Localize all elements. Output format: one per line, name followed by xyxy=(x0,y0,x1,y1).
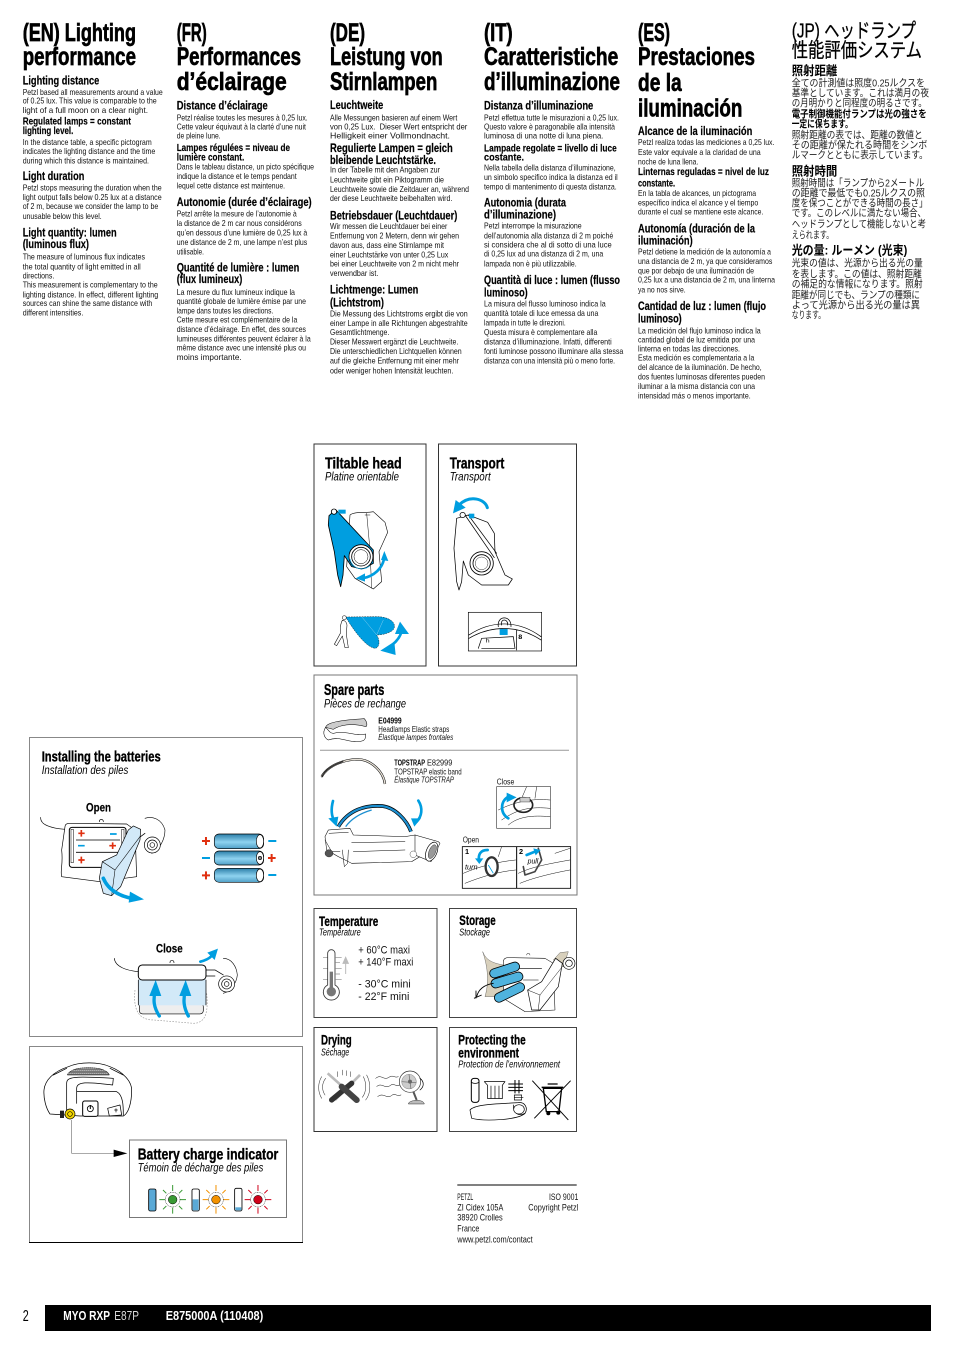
text block: ES alcance: Este valor equivale a la claridad de una xyxy=(638,147,761,157)
text block: DE Leuchtweite: Leuchtweite sowie die Zeitdauer an, während xyxy=(330,184,469,194)
heading: FR: d’éclairage xyxy=(177,68,287,96)
text block: IT lumen: La misura del flusso luminoso indica la xyxy=(484,299,606,309)
text block: DE Lichtmenge: Lichtmenge: Lumen xyxy=(330,283,418,296)
text block: IT distanza: costante. xyxy=(484,153,524,164)
text block: ES cantidad: dos fuentes luminosas diferentes pueden xyxy=(638,371,765,381)
text block: E04999 elastic straps xyxy=(378,716,454,742)
text block: ES cantidad: linterna en todas las direcciones. xyxy=(638,344,740,354)
heading: ES xyxy=(638,19,755,123)
text block: ES alcance: constante. xyxy=(638,179,675,190)
heading: ES: Prestaciones xyxy=(638,43,755,71)
text block: JP lighting distance: 照射距離 xyxy=(792,63,838,78)
panel: installing the batteries: Close xyxy=(156,942,183,955)
text block: JP light quantity: 光の量: ルーメン (光束) xyxy=(792,242,907,257)
text block: JP light quantity: を表します。この値は、照射距離 xyxy=(792,267,922,280)
panel: transport: Transport xyxy=(450,470,491,484)
heading: JP xyxy=(792,20,922,62)
panel: temperature xyxy=(314,908,437,1018)
heading: FR xyxy=(177,19,301,96)
heading: IT: (IT) xyxy=(484,19,513,47)
heading: IT xyxy=(484,19,620,96)
text block: FR lumen: lumineuses différentes peuvent éclairer à la xyxy=(177,333,311,343)
text block: IT distanza: tempo di mantenimento di questa distanza. xyxy=(484,181,617,191)
heading: DE: (DE) xyxy=(330,19,365,47)
text block: IT autonomia xyxy=(484,197,614,269)
icon: three batteries polarity xyxy=(202,834,276,882)
panel: installing the batteries: Installing the batteries xyxy=(42,749,161,766)
panel: tiltable head: Tiltable head xyxy=(325,455,402,472)
text block: ES cantidad: Esta medición es complementaria a la xyxy=(638,353,755,363)
footer: Petzl address: France xyxy=(457,1224,479,1234)
column: FR performances d'eclairage xyxy=(177,19,314,362)
text block: JP lighting distance: 基準としています。これは満月の夜 xyxy=(792,87,929,100)
text block: FR distance: lumière constant. xyxy=(177,153,244,164)
icon: elastic strap xyxy=(324,719,367,742)
icon: headlamp with topstrap xyxy=(325,801,440,867)
page number: 2 xyxy=(23,1308,29,1325)
text block: EN lighting distance: Regulated lamps = constant xyxy=(23,116,131,127)
text block: IT distanza: luminosa di una notte di luna piena. xyxy=(484,131,603,141)
panel: spare parts: Pièces de rechange xyxy=(324,696,406,710)
text block: topstrap: TOPSTRAP xyxy=(394,759,425,768)
text block: EN lighting distance: lighting level. xyxy=(23,126,73,137)
icon: thermometer xyxy=(323,950,348,1000)
text block: DE Leuchtweite xyxy=(330,99,469,203)
icon: transport locked detail inset: h xyxy=(486,638,490,644)
text block: IT autonomia: d’illuminazione) xyxy=(484,208,556,221)
text block: topstrap: TOPSTRAP elastic band xyxy=(394,766,462,776)
text block: FR autonomie: Petzl arrête la mesure de l’autonomie à xyxy=(177,209,297,219)
icon: open topstrap detail: 2 xyxy=(519,847,523,856)
text block: EN lighting distance: Petzl based all measurements around a value xyxy=(23,87,163,97)
footer: Petzl address: ZI Cidex 105A xyxy=(457,1203,503,1213)
icon: tilted headlamp side view xyxy=(328,509,388,589)
text block: ES alcance xyxy=(638,125,774,217)
heading: DE: Stirnlampen xyxy=(330,68,437,96)
text block: temperature range: + 140°F maxi xyxy=(358,957,413,969)
text block: ES autonomia: iluminación) xyxy=(638,234,693,247)
text block: DE Leuchtweite: Leuchtweite gibt ein Piktogramm die xyxy=(330,175,444,185)
panel: tiltable head xyxy=(314,444,426,666)
panel: protecting the environment xyxy=(450,1028,576,1132)
text block: FR lumen xyxy=(177,262,311,362)
heading: IT: d’illuminazione xyxy=(484,68,620,96)
heading: EN xyxy=(23,19,136,71)
text block: DE Betriebsdauer: davon aus, dass eine Stirnlampe mit xyxy=(330,240,445,250)
text block: EN light duration: light output falls below 0.25 lux at a distance xyxy=(23,192,162,202)
text block: EN light quantity: directions. xyxy=(23,271,54,281)
footer bar: product reference: E875000A (110408) xyxy=(166,1308,263,1323)
icon: close battery compartment xyxy=(114,949,237,1023)
text block: JP light duration: の距離で最低でも0.25ルクスの照 xyxy=(792,187,925,200)
text block: ES autonomia: Petzl detiene la medición de la autonomía a xyxy=(638,246,771,256)
icon: close topstrap detail: Close xyxy=(497,776,515,786)
heading: EN: (EN) Lighting xyxy=(23,19,136,47)
text block: IT lumen: fonti luminose possono illuminare alla stessa xyxy=(484,346,624,356)
text block: topstrap: Élastique TOPSTRAP xyxy=(394,775,454,785)
text block: ES autonomia: ya no nos sirve. xyxy=(638,284,686,294)
text block: ES cantidad: luminoso) xyxy=(638,312,682,325)
footer: Petzl address xyxy=(456,1185,578,1244)
panel: tiltable head: Platine orientable xyxy=(325,470,399,484)
text block: JP lighting distance: 一定に保ちます。 xyxy=(792,117,853,130)
text block: IT lumen: lampada in tutte le direzioni. xyxy=(484,318,566,328)
text block: JP lighting distance: その距離が保たれる時間をシンボ xyxy=(792,138,927,151)
text block: JP light duration: です。このレベルに満たない場合、 xyxy=(792,207,926,220)
heading: ES: iluminación xyxy=(638,95,742,123)
text block: DE Betriebsdauer: Betriebsdauer (Leuchtdauer) xyxy=(330,209,457,222)
arrow: indicator pointer xyxy=(72,1120,127,1157)
text block: IT distanza: Lampade regolate = livello di luce xyxy=(484,143,617,154)
text block: FR lumen: (flux lumineux) xyxy=(177,273,242,286)
text block: JP light quantity: よって光源から出る光の量は異 xyxy=(792,298,920,311)
text block: JP lighting distance: の月明かりと同程度の明るさです。 xyxy=(792,97,927,110)
text block: JP light duration: 度を保つことができる時間の長さ」 xyxy=(792,197,928,210)
footer: Petzl address: ISO 9001 xyxy=(549,1192,578,1202)
text block: ES alcance: Linternas reguladas = nivel de luz xyxy=(638,167,769,178)
text block: JP light duration: 照射時間 xyxy=(792,164,837,179)
text block: ES autonomia: que por debajo de una iluminación de xyxy=(638,265,754,275)
text block: DE Lichtmenge: Gesamtlichtmenge. xyxy=(330,327,389,337)
text block: EN lighting distance: Lighting distance xyxy=(23,75,100,88)
text block: JP light duration: えられます。 xyxy=(792,229,833,241)
panel: installing the batteries: Installation des piles xyxy=(42,763,128,777)
text block: temperature range: + 60°C maxi xyxy=(358,944,410,956)
text block: EN light quantity: sources can shine the same distance with xyxy=(23,298,153,308)
text block: JP light duration: ヘッドランプとして機能しないと考 xyxy=(792,217,926,230)
text block: EN lighting distance: during which this distance is maintained. xyxy=(23,155,149,165)
text block: JP lighting distance xyxy=(792,63,929,161)
text block: ES autonomia xyxy=(638,223,775,294)
footer: Petzl address: Copyright Petzl xyxy=(528,1203,578,1213)
footer bar: product reference: E87P xyxy=(114,1308,139,1323)
text block: topstrap: E82999 xyxy=(427,758,453,768)
text block: ES cantidad: cantidad global de luz emitida por una xyxy=(638,335,755,345)
text block: JP light quantity xyxy=(792,242,923,321)
panel: temperature: Temperature xyxy=(319,913,378,929)
text block: FR distance: indique la distance et le temps pendant xyxy=(177,171,297,181)
text block: EN light duration: of 2 m, because we consider the lamp to be xyxy=(23,201,159,211)
icon: recyclable parts xyxy=(470,1078,526,1120)
text block: E04999 elastic straps: Élastique lampes frontales xyxy=(378,732,454,742)
text block: JP light duration xyxy=(792,164,928,241)
text block: EN lighting distance: In the distance table, a specific pictogram xyxy=(23,137,152,147)
heading: JP: 性能評価システム xyxy=(792,39,922,62)
text block: DE Leuchtweite: Leuchtweite xyxy=(330,99,384,112)
icon: headlamp folded side view xyxy=(454,512,512,590)
callout: battery charge indicator: Témoin de décharge des piles xyxy=(138,1161,263,1175)
text block: EN light quantity: (luminous flux) xyxy=(23,238,89,251)
text block: EN light quantity: the total quantity of light emitted in all xyxy=(23,261,141,271)
text block: DE Lichtmenge: Die Messung des Lichtstroms ergibt die von xyxy=(330,309,468,319)
icon: open topstrap detail xyxy=(462,835,571,888)
icon: transport arrow xyxy=(453,499,487,513)
text block: ES alcance: En la tabla de alcances, un pictograma xyxy=(638,188,756,198)
icon: light beam tilt pictogram xyxy=(334,616,409,655)
column: JP headlamp performance xyxy=(792,20,929,321)
heading: DE xyxy=(330,19,443,96)
text block: EN light quantity: lighting distance. In effect, different lighting xyxy=(23,289,159,299)
text block: E04999 elastic straps: Headlamps Elastic straps xyxy=(378,724,449,734)
text block: ES alcance: Alcance de la iluminación xyxy=(638,125,752,138)
text block: FR distance: de pleine lune. xyxy=(177,131,221,141)
icon: open topstrap detail: 1 xyxy=(465,847,469,856)
text block: JP light quantity: 距離が同じでも、ランプの種類に xyxy=(792,288,920,301)
callout: battery charge indicator: Battery charge indicator xyxy=(138,1146,278,1163)
panel: battery charge indicator location xyxy=(29,1046,303,1242)
text block: FR lumen: La mesure du flux lumineux indique la xyxy=(177,287,295,297)
column: ES Prestaciones de la iluminacion xyxy=(638,19,775,400)
text block: IT distanza: Nella tabella della distanza d’illuminazione, xyxy=(484,163,616,173)
heading: IT: Caratteristiche xyxy=(484,43,618,71)
text block: FR distance: Distance d’éclairage xyxy=(177,99,268,112)
text block: ES autonomia: una distancia de 2 m, ya que consideramos xyxy=(638,256,772,266)
heading: JP: (JP) ヘッドランプ xyxy=(792,20,916,42)
text block: DE Leuchtweite: In der Tabelle mit den Angaben zur xyxy=(330,165,440,175)
text block: DE Betriebsdauer: verwendbar ist. xyxy=(330,268,378,278)
text block: IT autonomia: Petzl interrompe la misurazione xyxy=(484,220,582,230)
text block: FR autonomie xyxy=(177,196,312,256)
text block: FR lumen: même distance avec une intensité plus ou xyxy=(177,343,306,353)
text block: IT distanza: Questo valore è paragonabile alla intensità xyxy=(484,121,615,131)
text block: FR autonomie: la distance de 2 m car nous considérons xyxy=(177,218,302,228)
text block: IT distanza xyxy=(484,99,619,191)
text block: FR lumen: moins importante. xyxy=(177,352,242,362)
text block: JP light quantity: なります。 xyxy=(792,309,825,321)
icon: open topstrap detail: Open xyxy=(463,835,479,845)
text block: FR distance: Dans le tableau distance, un picto spécifique xyxy=(177,161,314,171)
text block: DE Betriebsdauer: Entfernung von 2 Metern, denn wir gehen xyxy=(330,230,459,240)
text block: EN lighting distance: light of a full moon on a clear night. xyxy=(23,105,148,115)
text block: IT autonomia: lampada non è più utilizzabile. xyxy=(484,259,577,269)
heading: ES: (ES) xyxy=(638,19,670,47)
text block: FR distance: Petzl réalise toutes les mesures à 0,25 lux. xyxy=(177,113,308,123)
icon: transport locked detail inset: 8 xyxy=(518,635,523,641)
text block: IT distanza: un simbolo specifico indica la distanza ed il xyxy=(484,172,618,182)
heading: FR: (FR) xyxy=(177,19,207,47)
text block: JP lighting distance: 照射距離の表では、距離の数値と xyxy=(792,128,923,141)
panel: spare parts xyxy=(314,675,577,895)
footer bar: product reference: MYO RXP xyxy=(63,1308,110,1323)
text block: DE Leuchtweite: von 0,25 Lux. Dieser Wert entspricht der xyxy=(330,121,467,131)
panel: spare parts: Spare parts xyxy=(324,682,384,699)
text block: JP lighting distance: 電子制御機能付ランプは光の強さを xyxy=(792,107,927,120)
text block: FR lumen: distance d’éclairage. En effet, des sources xyxy=(177,324,306,334)
text block: ES cantidad: del alcance de la iluminación. De hecho, xyxy=(638,362,762,372)
footer: Petzl address: 38920 Crolles xyxy=(457,1213,503,1223)
icon: crossed-out waste bin xyxy=(532,1081,571,1120)
icon: transport locked detail inset xyxy=(468,612,542,651)
icon: open topstrap detail: turn xyxy=(465,862,478,871)
icon: stored batteries removed from lamp xyxy=(474,952,575,1012)
icon: do not shake and use fan xyxy=(319,1070,424,1104)
heading: EN: performance xyxy=(23,43,136,71)
text block: DE Lichtmenge: Dieser Messwert ergänzt die Leuchtweite. xyxy=(330,336,458,346)
text block: EN lighting distance: indicates the lighting distance and the time xyxy=(23,146,156,156)
text block: IT lumen: luminoso) xyxy=(484,287,528,300)
panel: protecting the environment: environment xyxy=(458,1044,519,1060)
text block: DE Lichtmenge: Die unterschiedlichen Lichtquellen können xyxy=(330,346,462,356)
text block: EN light duration xyxy=(23,170,162,221)
panel: storage xyxy=(450,908,576,1018)
text block: DE Leuchtweite: Alle Messungen basieren auf einem Wert xyxy=(330,113,458,123)
text block: JP lighting distance: 全ての計測値は照度0.25ルクスを xyxy=(792,77,925,90)
panel: drying: Drying xyxy=(321,1032,352,1048)
footer bar: product reference xyxy=(45,1305,931,1331)
text block: IT lumen: distanza con una intensità più o meno forte. xyxy=(484,355,615,365)
panel: protecting the environment: Protecting the xyxy=(458,1032,526,1048)
column: EN lighting performance xyxy=(23,19,163,318)
heading: DE: Leistung von xyxy=(330,43,443,71)
text block: DE Leuchtweite: der diese Leuchtweite beibehalten wird. xyxy=(330,193,452,203)
text block: IT autonomia: si considera che al di sotto di una luce xyxy=(484,239,612,249)
panel: temperature: Température xyxy=(319,928,361,939)
panel: drying xyxy=(314,1028,437,1132)
text block: DE Leuchtweite: Helligkeit einer Vollmondnacht. xyxy=(330,131,450,141)
text block: ES alcance: noche de luna llena. xyxy=(638,156,698,166)
footer: Petzl address: PETZL xyxy=(457,1192,473,1202)
text block: ES autonomia: 0,25 lux a una distancia de 2 m, una linterna xyxy=(638,275,775,285)
text block: ES alcance: durante el cual se mantiene este alcance. xyxy=(638,207,763,217)
text block: ES cantidad: La medición del flujo luminoso indica la xyxy=(638,325,761,335)
icon: headlamp front view xyxy=(44,1063,132,1119)
text block: EN light quantity: This measurement is complementary to the xyxy=(23,279,158,289)
text block: JP lighting distance: ルマークとともに表示しています。 xyxy=(792,149,928,161)
text block: IT lumen xyxy=(484,274,624,365)
text block: DE Lichtmenge: oder weniger hohen Intensität leuchten. xyxy=(330,365,453,375)
icon: open battery compartment xyxy=(41,817,165,903)
text block: FR distance: Lampes régulées = niveau de xyxy=(177,143,290,154)
text block: DE Betriebsdauer: Wir messen die Leuchtdauer bei einer xyxy=(330,221,447,231)
panel: installing the batteries: Open xyxy=(86,802,111,815)
text block: EN light quantity: different intensities. xyxy=(23,308,83,318)
text block: IT lumen: Quantità di luce : lumen (flusso xyxy=(484,274,620,287)
text block: DE Lichtmenge: auf die gleiche Entfernung mit einer mehr xyxy=(330,355,459,365)
text block: IT lumen: quantità totale di luce emessa da una xyxy=(484,308,599,318)
text block: ES cantidad: intensidad más o menos importante. xyxy=(638,390,751,400)
panel: installing the batteries xyxy=(30,738,302,1036)
text block: EN light quantity: The measure of luminous flux indicates xyxy=(23,251,145,261)
heading: ES: de la xyxy=(638,69,683,97)
panel: transport: Transport xyxy=(450,455,505,472)
text block: FR autonomie: qu’en dessous d’une lumière de 0,25 lux à xyxy=(177,227,308,237)
text block: ES cantidad: iluminar a la misma distancia con una xyxy=(638,381,755,391)
text block: temperature range: - 22°F mini xyxy=(358,991,409,1003)
text block: FR lumen: Quantité de lumière : lumen xyxy=(177,262,299,275)
text block: FR distance xyxy=(177,99,314,191)
text block: IT lumen: distanza d’illuminazione. Infatti, differenti xyxy=(484,336,612,346)
text block: temperature range xyxy=(358,944,413,1003)
panel: protecting the environment: Protection de l’environnement xyxy=(458,1060,561,1071)
text block: FR autonomie: une distance de 2 m, une lampe n’est plus xyxy=(177,237,307,247)
text block: EN light quantity: Light quantity: lumen xyxy=(23,227,117,240)
text block: IT lumen: Questa misura è complementare alla xyxy=(484,327,598,337)
panel: storage: Stockage xyxy=(459,927,490,938)
text block: ES alcance: específico indica el alcance y el tiempo xyxy=(638,197,759,207)
icon: open topstrap detail: pull xyxy=(527,856,539,865)
text block: JP light duration: 照射時間は「ランプから2メートル xyxy=(792,177,924,190)
text block: DE Betriebsdauer: bei einer Leuchtweite von 2 m nicht mehr xyxy=(330,259,459,269)
text block: DE Betriebsdauer: einer Leuchtstärke von unter 0,25 Lux xyxy=(330,249,449,259)
text block: DE Lichtmenge xyxy=(330,283,468,375)
text block: IT autonomia: Autonomia (durata xyxy=(484,197,566,210)
text block: EN lighting distance xyxy=(23,75,163,165)
text block: DE Leuchtweite: bleibende Leuchtstärke. xyxy=(330,154,436,167)
text block: IT autonomia: dell’autonomia alla distanza di 2 m poiché xyxy=(484,230,614,240)
text block: DE Lichtmenge: (Lichtstrom) xyxy=(330,297,384,310)
text block: IT distanza: Distanza d’illuminazione xyxy=(484,99,594,112)
text block: ES autonomia: Autonomía (duración de la xyxy=(638,223,755,236)
text block: topstrap xyxy=(394,758,462,785)
text block: FR lumen: Cette mesure est complémentaire de la xyxy=(177,315,298,325)
text block: IT distanza: Petzl effettua tutte le misurazioni a 0,25 lux. xyxy=(484,113,619,123)
text block: FR autonomie: utilisable. xyxy=(177,246,204,256)
text block: DE Betriebsdauer xyxy=(330,209,459,278)
text block: DE Lichtmenge: einer Lampe in alle Richtungen abgestrahlte xyxy=(330,318,468,328)
text block: FR distance: Cette valeur équivaut à la clarté d’une nuit xyxy=(177,121,307,131)
icon: close topstrap detail xyxy=(497,776,551,828)
panel: transport xyxy=(438,444,576,666)
footer: Petzl address: www.petzl.com/contact xyxy=(456,1234,533,1244)
text block: FR distance: lequel cette distance est maintenue. xyxy=(177,181,285,191)
heading: FR: Performances xyxy=(177,43,301,71)
column: DE Leistung von Stirnlampen xyxy=(330,19,469,375)
text block: EN light duration: Light duration xyxy=(23,170,84,183)
text block: EN lighting distance: of 0.25 lux. This value is comparable to the xyxy=(23,96,157,106)
icon: topstrap band xyxy=(322,759,385,784)
column: IT Caratteristiche d'illuminazione xyxy=(484,19,624,365)
text block: FR lumen: lampe dans toutes les directions. xyxy=(177,305,273,315)
text block: EN light quantity xyxy=(23,227,159,318)
text block: ES cantidad xyxy=(638,300,766,400)
text block: JP light quantity: の補足的な情報になります。照射 xyxy=(792,277,923,290)
text block: FR lumen: quantité globale de lumière émise par une xyxy=(177,296,306,306)
icon: charge state LEDs xyxy=(149,1185,271,1214)
text block: IT autonomia: di 0,25 lux ad una distanza di 2 m, una xyxy=(484,249,604,259)
text block: JP light quantity: 光束の値は、光源から出る光の量 xyxy=(792,257,923,270)
text block: DE Leuchtweite: Regulierte Lampen = gleich xyxy=(330,142,453,155)
text block: ES cantidad: Cantidad de luz : lumen (flujo xyxy=(638,300,766,313)
text block: FR autonomie: Autonomie (durée d’éclairage) xyxy=(177,196,312,209)
text block: ES alcance: Petzl realiza todas las mediciones a 0,25 lux. xyxy=(638,137,774,147)
text block: EN light duration: unusable below this level. xyxy=(23,211,102,221)
panel: drying: Séchage xyxy=(321,1047,350,1058)
text block: temperature range: - 30°C mini xyxy=(358,979,411,991)
panel: storage: Storage xyxy=(459,912,496,928)
text block: E04999 elastic straps: E04999 xyxy=(378,716,402,725)
callout: battery charge indicator xyxy=(130,1140,286,1218)
text block: EN light duration: Petzl stops measuring the duration when the xyxy=(23,183,162,193)
